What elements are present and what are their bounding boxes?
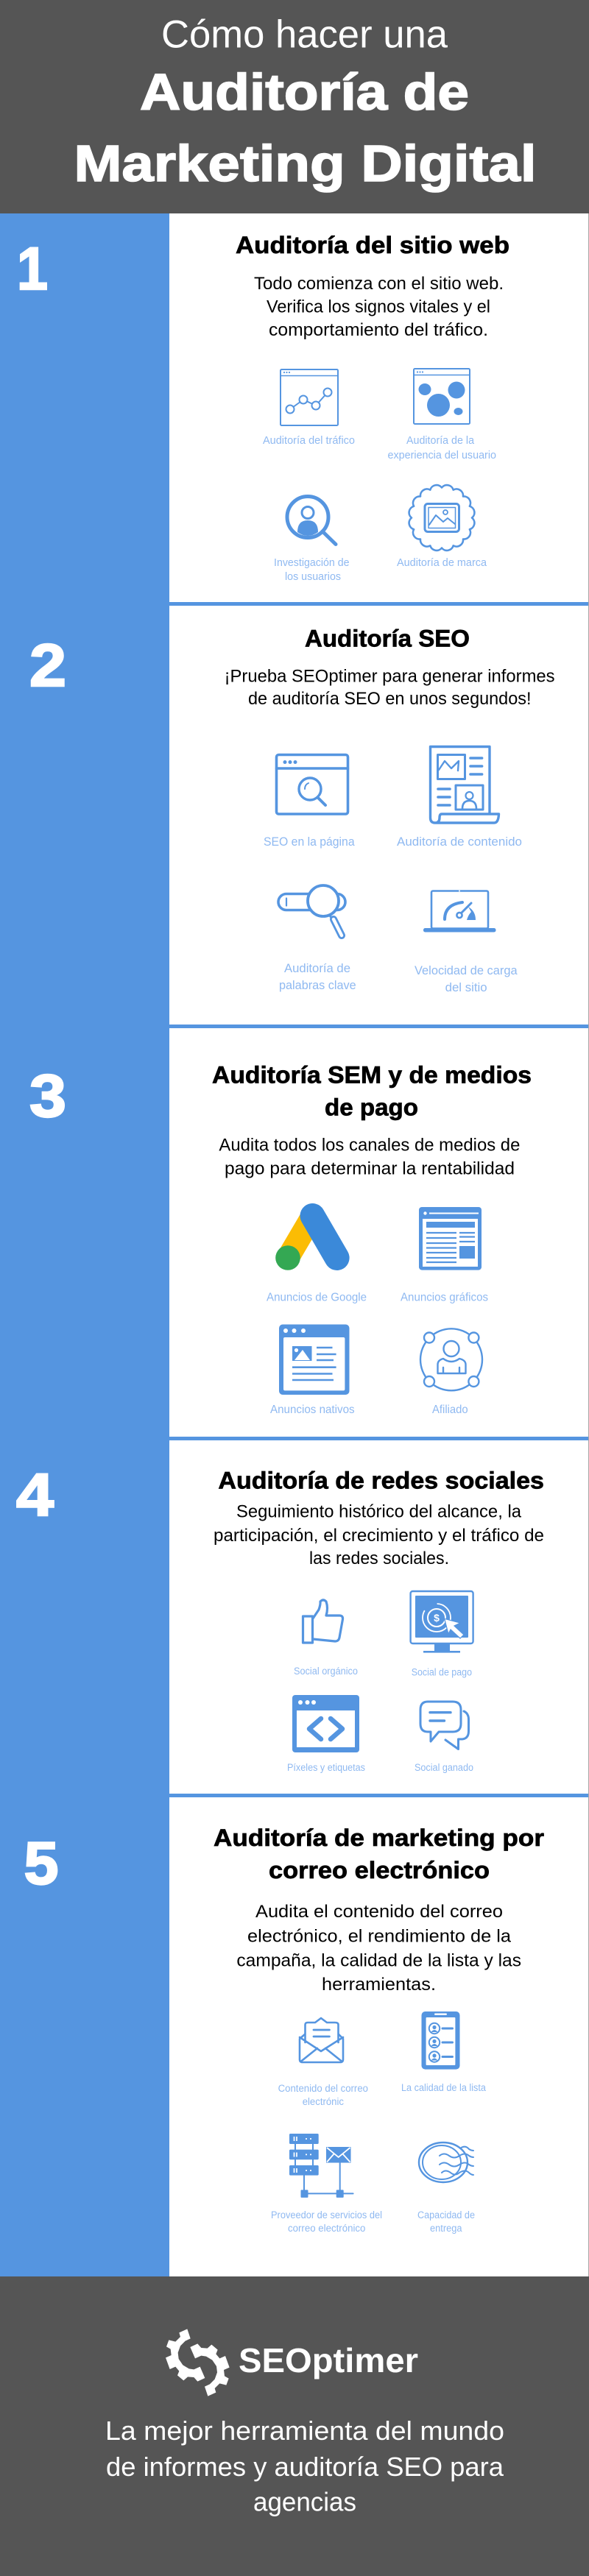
caption: email content: Contenido del correo bbox=[278, 2083, 368, 2094]
footer tagline: agencias bbox=[253, 2487, 356, 2517]
caption: email service provider bbox=[271, 2209, 382, 2234]
description bbox=[236, 1902, 521, 1995]
caption: email content: electrónic bbox=[303, 2096, 344, 2107]
footer tagline: La mejor herramienta del mundo bbox=[105, 2416, 504, 2446]
caption: user research bbox=[274, 556, 349, 583]
number 5: 5 bbox=[24, 1830, 59, 1897]
title line 2: Auditoría de bbox=[140, 63, 469, 121]
description: de auditoría SEO en unos segundos! bbox=[248, 689, 532, 709]
title line 1: Cómo hacer una bbox=[161, 13, 448, 56]
caption: brand audit: Auditoría de marca bbox=[397, 556, 487, 569]
description: comportamiento del tráfico. bbox=[269, 320, 488, 340]
icon: organic social bbox=[303, 1600, 343, 1643]
icon: Google Ads bbox=[275, 1216, 337, 1270]
icon: pixels and tags bbox=[292, 1695, 359, 1752]
title line 3: Marketing Digital bbox=[74, 135, 536, 192]
icon: brand audit bbox=[409, 485, 474, 551]
icon: user experience audit bbox=[414, 369, 470, 424]
number 1: 1 bbox=[17, 236, 48, 302]
icon: deliverability bbox=[419, 2142, 473, 2182]
caption: keyword audit: Auditoría de bbox=[284, 961, 350, 975]
description: pago para determinar la rentabilidad bbox=[225, 1158, 515, 1179]
description: electrónico, el rendimiento de la bbox=[247, 1927, 511, 1946]
footer tagline bbox=[105, 2416, 504, 2517]
caption: user experience audit: Auditoría de la bbox=[406, 434, 475, 447]
caption: on-page SEO: SEO en la página bbox=[264, 835, 355, 849]
caption: content audit: Auditoría de contenido bbox=[397, 835, 522, 849]
caption: user research: Investigación de bbox=[274, 556, 349, 569]
caption: keyword audit: palabras clave bbox=[279, 978, 356, 992]
footer bbox=[0, 2276, 589, 2576]
panel: section 4 social media audit bbox=[0, 1437, 588, 1794]
description: Todo comienza con el sitio web. bbox=[254, 274, 504, 294]
heading bbox=[214, 1825, 544, 1883]
icon: list quality bbox=[421, 2011, 459, 2070]
caption: traffic audit: Auditoría del tráfico bbox=[263, 434, 355, 447]
heading: correo electrónico bbox=[269, 1857, 490, 1883]
caption: native ads: Anuncios nativos bbox=[270, 1404, 355, 1416]
icon: site speed bbox=[423, 891, 496, 932]
description: campaña, la calidad de la lista y las bbox=[236, 1950, 521, 1971]
caption: user experience audit: experiencia del usuario bbox=[387, 449, 496, 461]
panel: section 5 email marketing audit bbox=[0, 1794, 588, 2276]
panel: section 3 SEM and paid media audit bbox=[0, 1025, 588, 1437]
caption: email service provider: Proveedor de servicios del bbox=[271, 2209, 382, 2221]
icon: user research bbox=[287, 496, 336, 545]
icon: email content bbox=[300, 2018, 343, 2062]
caption: organic social: Social orgánico bbox=[294, 1666, 358, 1677]
caption: affiliate: Afiliado bbox=[432, 1404, 468, 1416]
caption: pixels and tags: Píxeles y etiquetas bbox=[287, 1762, 365, 1773]
description: Audita todos los canales de medios de bbox=[219, 1135, 520, 1155]
caption: site speed bbox=[415, 963, 518, 994]
icon: paid social: $ bbox=[434, 1612, 440, 1624]
caption: deliverability bbox=[417, 2209, 475, 2234]
caption: user experience audit bbox=[387, 434, 496, 461]
number 2: 2 bbox=[29, 632, 66, 699]
logo gear bbox=[166, 2329, 230, 2396]
description: herramientas. bbox=[322, 1975, 436, 1995]
number 4: 4 bbox=[16, 1462, 54, 1529]
description bbox=[225, 666, 555, 709]
description: Seguimiento histórico del alcance, la bbox=[236, 1502, 521, 1522]
caption: site speed: Velocidad de carga bbox=[415, 963, 518, 977]
description bbox=[219, 1135, 520, 1179]
description: participación, el crecimiento y el tráfico de bbox=[214, 1526, 544, 1546]
description bbox=[254, 274, 504, 340]
description bbox=[214, 1502, 544, 1568]
heading: Auditoría de marketing por bbox=[214, 1825, 544, 1851]
icon: keyword audit bbox=[278, 885, 345, 935]
caption: Google Ads: Anuncios de Google bbox=[267, 1292, 367, 1304]
icon: native ads bbox=[279, 1325, 349, 1395]
icon: content audit bbox=[430, 746, 499, 823]
panel: section 2 SEO audit bbox=[0, 602, 588, 1025]
caption: display ads: Anuncios gráficos bbox=[401, 1292, 488, 1304]
heading: Auditoría de redes sociales bbox=[218, 1468, 544, 1494]
heading: Auditoría SEO bbox=[305, 626, 470, 652]
icon: on-page SEO bbox=[277, 755, 348, 814]
icon: email service provider bbox=[289, 2134, 353, 2198]
heading: de pago bbox=[325, 1094, 418, 1120]
caption: email service provider: correo electrónico bbox=[288, 2223, 365, 2234]
panel: section 1 website audit bbox=[0, 213, 588, 602]
description: Audita el contenido del correo bbox=[255, 1902, 503, 1922]
description: las redes sociales. bbox=[309, 1549, 449, 1568]
heading: Auditoría del sitio web bbox=[236, 232, 509, 258]
icon: earned social bbox=[420, 1702, 468, 1749]
number 3: 3 bbox=[29, 1063, 66, 1130]
description: Verifica los signos vitales y el bbox=[267, 297, 490, 316]
heading: Auditoría SEM y de medios bbox=[212, 1061, 532, 1088]
caption: list quality: La calidad de la lista bbox=[401, 2082, 486, 2093]
header banner bbox=[0, 0, 589, 213]
logo: SEOptimer bbox=[166, 2329, 418, 2396]
icon: display ads bbox=[419, 1207, 482, 1270]
heading bbox=[212, 1061, 532, 1120]
caption: keyword audit bbox=[279, 961, 356, 992]
caption: deliverability: Capacidad de bbox=[417, 2209, 475, 2221]
divider lines bbox=[169, 604, 589, 1796]
caption: user research: los usuarios bbox=[285, 570, 341, 583]
footer tagline: de informes y auditoría SEO para bbox=[106, 2452, 504, 2482]
caption: earned social: Social ganado bbox=[415, 1762, 473, 1773]
caption: email content bbox=[278, 2083, 368, 2107]
icon: affiliate bbox=[420, 1328, 482, 1390]
caption: deliverability: entrega bbox=[430, 2223, 462, 2234]
caption: paid social: Social de pago bbox=[412, 1667, 472, 1678]
description: ¡Prueba SEOptimer para generar informes bbox=[225, 666, 555, 686]
caption: site speed: del sitio bbox=[445, 980, 487, 994]
logo wordmark: SEOptimer bbox=[239, 2341, 418, 2379]
icon: paid social bbox=[411, 1591, 473, 1653]
icon: traffic audit bbox=[281, 369, 338, 425]
